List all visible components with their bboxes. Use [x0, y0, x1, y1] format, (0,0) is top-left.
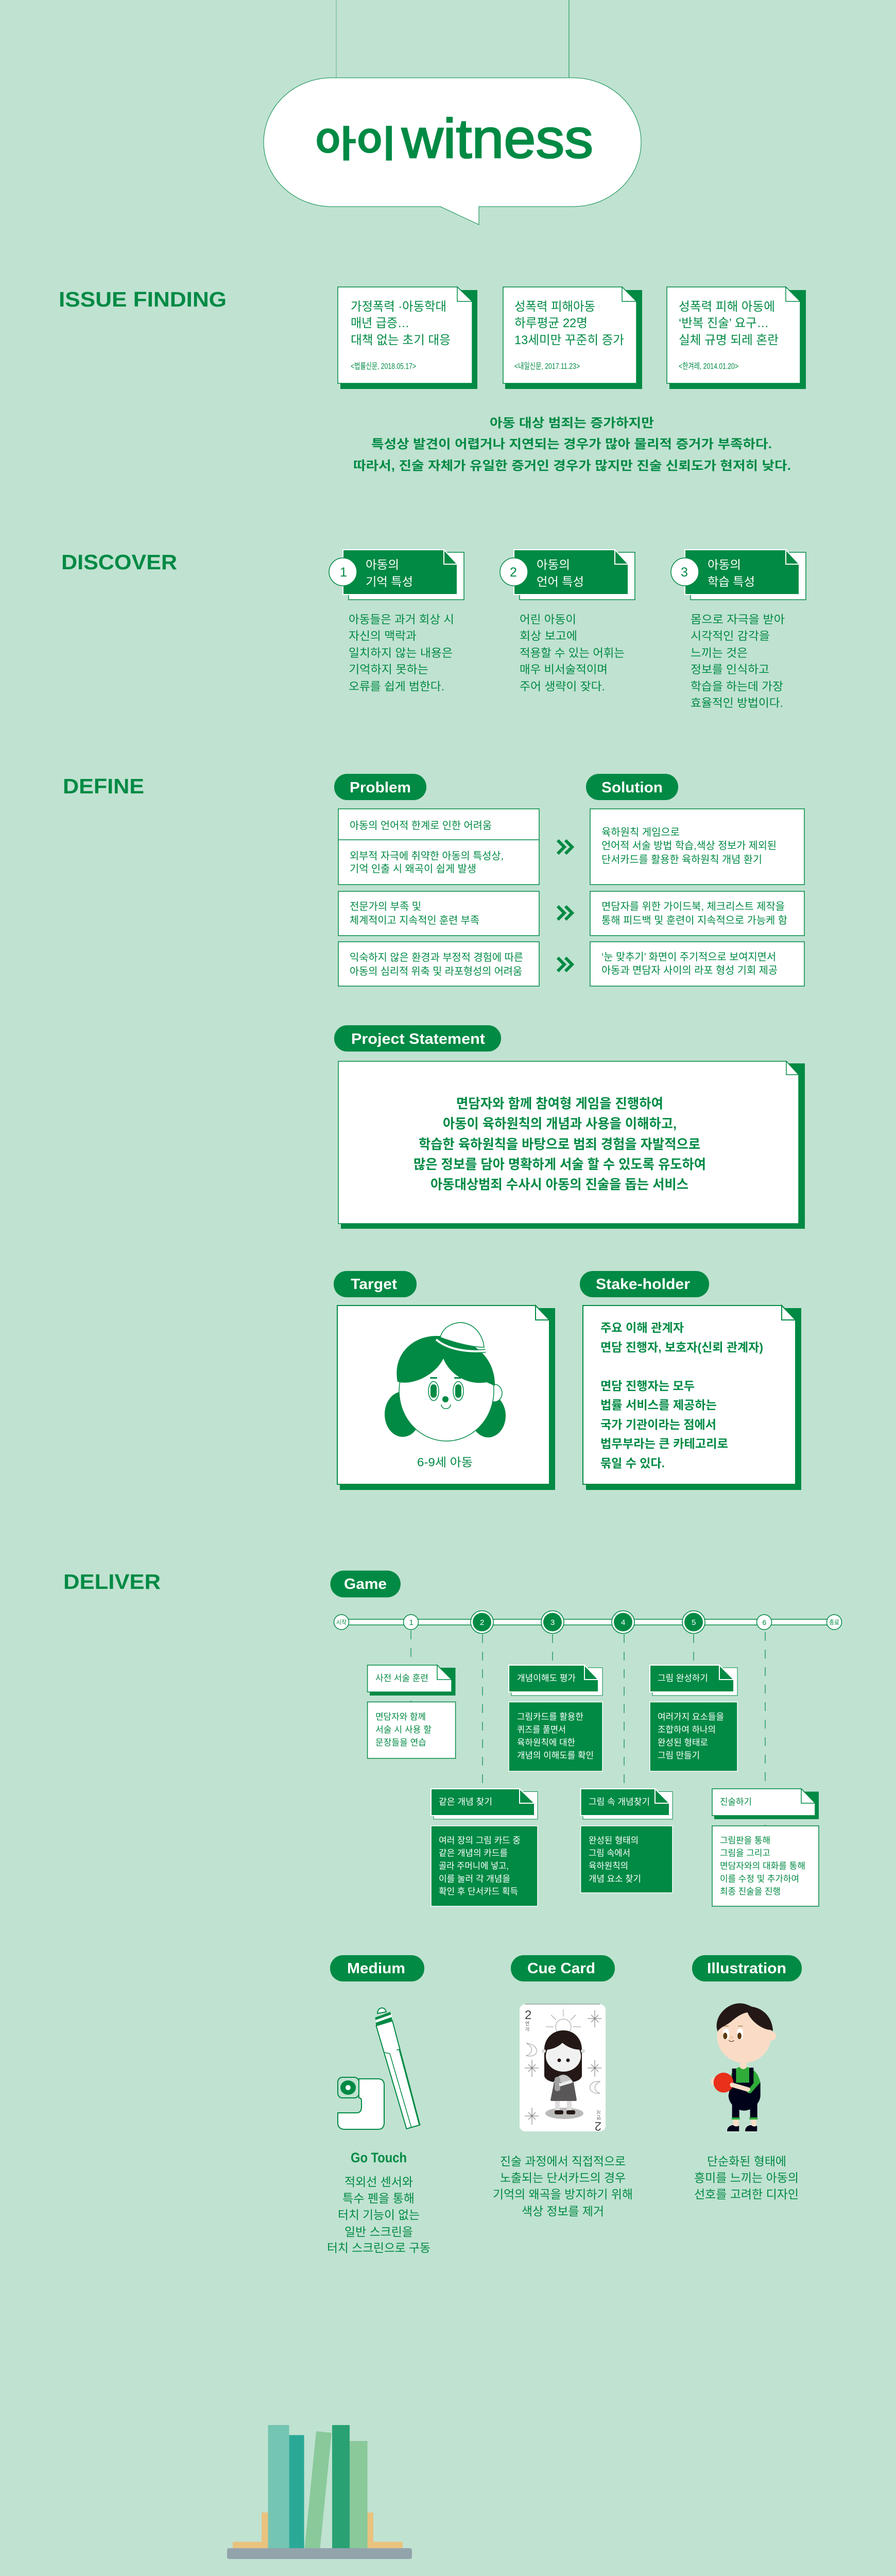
- panel: solution boxes: 언어적 서술 방법 학습,색상 정보가 제외된: [601, 840, 777, 852]
- step 6: card: 그림판을 통해: [720, 1836, 770, 1845]
- pill: cue card: [511, 1955, 615, 1981]
- panel: stake-holder card: 주요 이해 관계자: [600, 1321, 684, 1334]
- panel: solution boxes: 단서카드를 활용한 육하원칙 개념 환기: [601, 854, 762, 866]
- panel: news card 2: 성폭력 피해아동: [514, 300, 595, 314]
- pill: problem: Problem: [350, 779, 411, 796]
- panel: problem boxes: 전문가의 부족 및: [350, 901, 421, 912]
- text: cue card: 진술 과정에서 직접적으로: [500, 2155, 626, 2168]
- panel: discover 2: 언어 특성: [537, 575, 584, 588]
- text: go touch: 일반 스크린을: [344, 2225, 413, 2239]
- text: cue card: 기억의 왜곡을 방지하기 위해: [493, 2188, 633, 2201]
- panel: discover 3: 3: [681, 565, 688, 580]
- step 5: card: 완성된 형태로: [658, 1738, 708, 1748]
- panel: discover 3: [671, 550, 806, 709]
- panel: news card 1: 가정폭력 ·아동학대: [351, 300, 446, 314]
- panel: solution boxes: 통해 피드백 및 훈련이 지속적으로 가능케 함: [601, 914, 787, 926]
- panel: problem boxes: 외부적 자극에 취약한 아동의 특성상,: [350, 850, 504, 862]
- panel: discover 2: [500, 550, 635, 693]
- step 5: card: 그림 완성하기: [658, 1673, 708, 1683]
- step 3: card: 개념이해도 평가: [517, 1673, 576, 1683]
- step 4: card: 개념 요소 찾기: [589, 1874, 641, 1884]
- step 4: card: [581, 1789, 673, 1893]
- panel: project statement card: 많은 정보를 담아 명확하게 서술 할 수 있도록 유도하여: [413, 1157, 706, 1172]
- illustration: boy with ball: [711, 2003, 776, 2131]
- logo wordmark: witness: [401, 107, 593, 170]
- step 5: card: 조합하여 하나의: [658, 1725, 716, 1735]
- text: go touch: 터치 기능이 없는: [338, 2208, 420, 2222]
- panel: discover 2: 아동의: [537, 558, 570, 571]
- icon: go touch sensor: [338, 2077, 384, 2129]
- card index top: 제: [525, 2027, 529, 2032]
- panel: discover 1: 1: [340, 565, 347, 580]
- panel: discover 1: 일치하지 않는 내용은: [349, 647, 453, 659]
- node: 2: 2: [480, 1618, 484, 1627]
- panel: discover 2: 어린 아동이: [520, 613, 576, 626]
- step 3: card: 퀴즈를 풀면서: [517, 1725, 566, 1735]
- icon: go touch pen: [375, 2008, 420, 2129]
- panel: stake-holder card: 면담 진행자, 보호자(신뢰 관계자): [600, 1341, 763, 1354]
- step 5: card: 그림 만들기: [658, 1751, 700, 1760]
- step 2: card: [431, 1789, 538, 1906]
- issue summary text: [353, 416, 791, 473]
- panel: discover 2: 회상 보고에: [520, 630, 577, 642]
- step 2: card: 같은 개념 찾기: [439, 1797, 492, 1807]
- timeline: [334, 1611, 841, 1633]
- panel: problem boxes: 아동의 언어적 한계로 인한 어려움: [350, 820, 492, 832]
- text: go touch: Go Touch: [351, 2150, 407, 2165]
- panel: project statement card: 면담자와 함께 참여형 게임을 진행하여: [456, 1096, 663, 1111]
- panel: stake-holder card: [583, 1306, 801, 1490]
- pill: solution: [586, 774, 678, 800]
- text: illustration: 선호를 고려한 디자인: [694, 2188, 799, 2201]
- panel: stake-holder card: 묶일 수 있다.: [600, 1456, 665, 1470]
- step 3: card: 육하원칙에 대한: [517, 1738, 575, 1748]
- panel: news card 1: 대책 없는 초기 대응: [351, 333, 451, 347]
- text: illustration: [694, 2155, 799, 2201]
- step 5: card: [650, 1665, 737, 1771]
- panel: target card: [337, 1306, 555, 1490]
- step 1: card: 사전 서술 훈련: [375, 1673, 428, 1683]
- text: go touch: [327, 2150, 430, 2255]
- step 6: card: [712, 1789, 819, 1906]
- panel: target card: 6-9세 아동: [417, 1455, 473, 1469]
- panel: news card 3: <한겨레, 2014.01.20>: [679, 362, 738, 371]
- panel: discover 2: 2: [510, 565, 517, 580]
- step 6: card: 면담자와의 대화를 통해: [720, 1861, 805, 1871]
- node: 1: [404, 1615, 418, 1630]
- panel: discover 1: 오류를 쉽게 범한다.: [349, 680, 444, 693]
- node: end: [827, 1615, 841, 1630]
- pill: stake-holder: [580, 1271, 709, 1297]
- pill: game: [331, 1570, 401, 1597]
- panel: solution boxes: ‘눈 맞추기’ 화면이 주기적으로 보여지면서: [601, 951, 776, 963]
- panel: discover 1: 아동의: [366, 558, 399, 571]
- panel: discover 3: 아동의: [708, 558, 741, 571]
- node: 3: 3: [550, 1618, 555, 1627]
- text: cue card: 색상 정보를 제거: [522, 2205, 604, 2218]
- logo speech bubble: [264, 0, 641, 225]
- card index top: [525, 2008, 531, 2032]
- text: cue card: [493, 2155, 633, 2218]
- card index bottom: 제: [597, 2109, 601, 2114]
- panel: problem boxes: 체계적이고 지속적인 훈련 부족: [350, 914, 479, 926]
- step 3: card: 개념의 이해도를 확인: [517, 1751, 594, 1760]
- step 2: card: 확인 후 단서카드 획득: [439, 1887, 518, 1896]
- node: 6: 6: [762, 1618, 766, 1626]
- icon: child face: [385, 1323, 506, 1441]
- panel: solution boxes: 아동과 면담자 사이의 라포 형성 기회 제공: [601, 964, 778, 976]
- node: start: [334, 1615, 349, 1630]
- card index bottom: [595, 2109, 601, 2133]
- panel: solution boxes: [590, 809, 804, 986]
- node: 1: 1: [409, 1618, 413, 1627]
- panel: problem boxes: 기억 인출 시 왜곡이 쉽게 발생: [350, 863, 476, 875]
- heading: issue finding: ISSUE FINDING: [59, 287, 227, 311]
- node: start: 시작: [336, 1619, 347, 1626]
- text: go touch: 특수 펜을 통해: [342, 2192, 415, 2205]
- timeline connectors: [411, 1631, 765, 1826]
- step 4: card: 그림 속에서: [589, 1849, 630, 1858]
- card girl: [542, 2030, 585, 2119]
- panel: project statement card: 아동이 육하원칙의 개념과 사용을 이해하고,: [443, 1116, 677, 1131]
- panel: stake-holder card: 면담 진행자는 모두: [600, 1379, 695, 1393]
- panel: news card 3: 성폭력 피해 아동에: [679, 300, 775, 314]
- step 6: card: 그림을 그리고: [720, 1849, 770, 1858]
- step 4: card: 육하원칙의: [589, 1861, 628, 1871]
- panel: discover 1: [329, 550, 464, 693]
- card index top: 2: [525, 2008, 531, 2022]
- pill: target: [334, 1271, 417, 1297]
- step 6: card: 이를 수정 및 추가하여: [720, 1874, 799, 1884]
- panel: discover 3: 효율적인 방법이다.: [691, 697, 783, 709]
- step 2: card: 여러 장의 그림 카드 중: [439, 1836, 521, 1845]
- panel: news card 2: 13세미만 꾸준히 증가: [514, 333, 624, 347]
- text: go touch: 터치 스크린으로 구동: [327, 2241, 430, 2255]
- step 1: card: 서술 시 사용 할: [375, 1725, 432, 1735]
- heading: define: DEFINE: [63, 774, 144, 798]
- logo wordmark: [315, 107, 593, 170]
- panel: project statement card: [338, 1061, 805, 1229]
- panel: stake-holder card: 국가 기관이라는 점에서: [600, 1418, 716, 1431]
- issue summary text: 특성상 발견이 어렵거나 지연되는 경우가 많아 물리적 증거가 부족하다.: [371, 437, 772, 451]
- step 2: card: 골라 주머니에 넣고,: [439, 1861, 509, 1871]
- icon: cue card: [520, 2004, 606, 2133]
- step 2: card: 같은 개념의 카드를: [439, 1849, 508, 1858]
- card index bottom: 2: [595, 2119, 601, 2133]
- text: illustration: 흥미를 느끼는 아동의: [694, 2171, 799, 2184]
- pill: target: Target: [351, 1276, 397, 1293]
- step 2: card: 이를 눌러 각 개념을: [439, 1874, 510, 1884]
- node: 5: [682, 1611, 705, 1633]
- step 5: card: 여러가지 요소들을: [658, 1712, 724, 1722]
- panel: project statement card: 학습한 육하원칙을 바탕으로 범죄 경험을 자발적으로: [419, 1137, 700, 1152]
- pill: medium: [330, 1955, 424, 1981]
- node: 5: 5: [692, 1618, 696, 1627]
- panel: news card 1: 매년 급증…: [351, 316, 409, 330]
- panel: discover 2: 적용할 수 있는 어휘는: [520, 647, 625, 659]
- pill: illustration: [692, 1955, 802, 1981]
- heading: discover: DISCOVER: [61, 550, 177, 574]
- logo wordmark: 아이: [315, 124, 397, 164]
- panel: solution boxes: 면담자를 위한 가이드북, 체크리스트 제작을: [601, 901, 785, 912]
- pill: project statement: Project Statement: [351, 1031, 485, 1047]
- panel: stake-holder card: 법무부라는 큰 카테고리로: [600, 1437, 728, 1450]
- step 3: card: 그림카드를 활용한: [517, 1712, 583, 1722]
- panel: discover 3: 느끼는 것은: [691, 647, 748, 659]
- step 1: card: 면담자와 함께: [375, 1712, 426, 1722]
- node: 2: [471, 1611, 493, 1633]
- panel: discover 2: 주어 생략이 잦다.: [520, 680, 605, 693]
- node: 6: [757, 1615, 771, 1630]
- card index bottom: 언: [597, 2115, 601, 2121]
- heading: deliver: DELIVER: [63, 1570, 161, 1594]
- panel: discover 2: 매우 비서술적이며: [520, 663, 608, 676]
- panel: discover 1: 기억 특성: [366, 575, 413, 588]
- panel: discover 1: 자신의 맥락과: [349, 630, 417, 642]
- step 1: card: [368, 1665, 456, 1758]
- card sun, stars and moons: [525, 2009, 601, 2125]
- panel: news card 2: [503, 287, 642, 389]
- panel: discover 3: 정보를 인식하고: [691, 663, 769, 676]
- panel: discover 3: 학습을 하는데 가장: [691, 680, 783, 693]
- text: go touch: 적외선 센서와: [344, 2175, 413, 2189]
- pill: illustration: Illustration: [707, 1960, 786, 1977]
- panel: project statement card: 아동대상범죄 수사시 아동의 진술을 돕는 서비스: [430, 1177, 688, 1192]
- issue summary text: 따라서, 진술 자체가 유일한 증거인 경우가 많지만 진술 신뢰도가 현저히 낮다.: [353, 459, 791, 473]
- step 1: card: 문장들을 연습: [375, 1738, 426, 1748]
- card index top: 언: [525, 2021, 529, 2026]
- pill: game: Game: [344, 1576, 387, 1592]
- node: 4: [612, 1611, 634, 1633]
- step 3: card: [509, 1665, 602, 1771]
- step 4: card: 완성된 형태의: [589, 1836, 639, 1845]
- panel: news card 3: [667, 287, 806, 389]
- arrows: problem to solution: [558, 840, 572, 971]
- panel: discover 1: 기억하지 못하는: [349, 663, 428, 676]
- panel: news card 1: <법률신문, 2018.05.17>: [351, 362, 416, 371]
- panel: news card 2: 하루평균 22명: [514, 316, 588, 330]
- panel: problem boxes: 익숙하지 않은 환경과 부정적 경험에 따른: [350, 952, 523, 963]
- panel: discover 3: 몸으로 자극을 받아: [691, 613, 785, 626]
- panel: problem boxes: [338, 809, 539, 986]
- panel: news card 1: [338, 287, 477, 389]
- issue summary text: 아동 대상 범죄는 증가하지만: [490, 416, 654, 430]
- step 6: card: 최종 진술을 진행: [720, 1887, 781, 1896]
- step 4: card: 그림 속 개념찾기: [589, 1797, 650, 1807]
- pill: solution: Solution: [601, 779, 663, 796]
- pill: medium: Medium: [347, 1960, 405, 1977]
- pill: stake-holder: Stake-holder: [596, 1276, 690, 1293]
- panel: discover 3: 학습 특성: [708, 575, 755, 588]
- panel: news card 3: ‘반복 진술’ 요구…: [679, 316, 769, 330]
- panel: news card 3: 실체 규명 되레 혼란: [679, 333, 779, 347]
- pill: cue card: Cue Card: [527, 1960, 595, 1977]
- node: end: 종료: [829, 1619, 839, 1626]
- panel: discover 1: 아동들은 과거 회상 시: [349, 613, 454, 626]
- node: 3: [541, 1611, 564, 1633]
- panel: problem boxes: 아동의 심리적 위축 및 라포형성의 어려움: [350, 965, 522, 977]
- text: cue card: 노출되는 단서카드의 경우: [500, 2171, 626, 2184]
- step 6: card: 진술하기: [720, 1797, 752, 1807]
- text: illustration: 단순화된 형태에: [707, 2155, 786, 2168]
- panel: solution boxes: 육하원칙 게임으로: [601, 826, 680, 838]
- pill: problem: [334, 774, 426, 800]
- panel: news card 2: <내일신문, 2017.11.23>: [514, 362, 580, 371]
- illustration: bookshelf: [227, 2425, 412, 2559]
- panel: discover 3: 시각적인 감각을: [691, 630, 770, 642]
- panel: stake-holder card: 법률 서비스를 제공하는: [600, 1398, 717, 1412]
- pill: project statement: [334, 1025, 501, 1052]
- node: 4: 4: [621, 1618, 625, 1627]
